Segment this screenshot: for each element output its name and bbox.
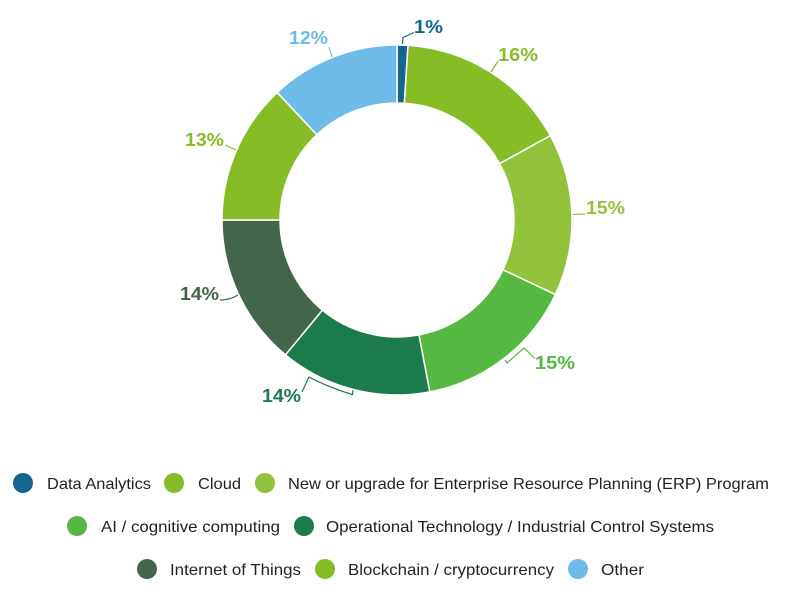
- donut chart: [222, 45, 572, 395]
- legend: [13, 473, 769, 579]
- legend item: Data Analytics: [13, 473, 151, 493]
- segment: Blockchain 13%: [222, 92, 317, 220]
- segment: Other 12%: [277, 45, 397, 135]
- segment: AI / cognitive computing 15%: [419, 270, 555, 392]
- label: 12%: [289, 27, 332, 57]
- label: 15% AI: [505, 348, 575, 373]
- legend item: Data Analytics: Data Analytics: [47, 476, 151, 493]
- legend item: Internet of Things: [137, 559, 301, 579]
- label: 16%: 16%: [498, 44, 538, 65]
- legend item: Cloud: [164, 473, 241, 493]
- legend item: Cloud: Cloud: [198, 476, 241, 493]
- label: 1%: [402, 16, 443, 44]
- label: 16%: [491, 44, 538, 72]
- legend item: Operational Technology: Operational Technology / Industrial Control Systems: [326, 519, 714, 536]
- segment: Data Analytics 1%: [397, 45, 408, 103]
- label: 15% ERP: 15%: [586, 197, 625, 218]
- segment: Internet of Things 14%: [222, 220, 322, 355]
- legend item: Blockchain / cryptocurrency: Blockchain / cryptocurrency: [348, 562, 554, 579]
- segment: Cloud 16%: [404, 45, 550, 164]
- label: 14% Operational Technology: 14%: [262, 385, 301, 406]
- legend item: Other: [568, 559, 645, 579]
- label: 15% AI: 15%: [535, 352, 575, 373]
- legend item: Internet of Things: Internet of Things: [170, 562, 301, 579]
- legend item: AI / cognitive computing: AI / cognitive computing: [101, 519, 280, 536]
- legend item: Other: Other: [601, 562, 645, 579]
- label: 12%: 12%: [289, 27, 328, 48]
- label: 1%: 1%: [414, 16, 443, 37]
- label: 13%: 13%: [185, 129, 224, 150]
- segment: Operational Technology 14%: [285, 310, 430, 395]
- label: 14% Operational Technology: [262, 377, 353, 406]
- legend item: ERP Program: New or upgrade for Enterprise Resource Planning (ERP) Program: [288, 476, 769, 493]
- label: 14% Internet of Things: 14%: [180, 283, 219, 304]
- legend item: AI / cognitive computing: [67, 516, 280, 536]
- legend item: Blockchain / cryptocurrency: [315, 559, 554, 579]
- segment: ERP Program 15%: [500, 136, 572, 295]
- label: 14% Internet of Things: [180, 283, 238, 304]
